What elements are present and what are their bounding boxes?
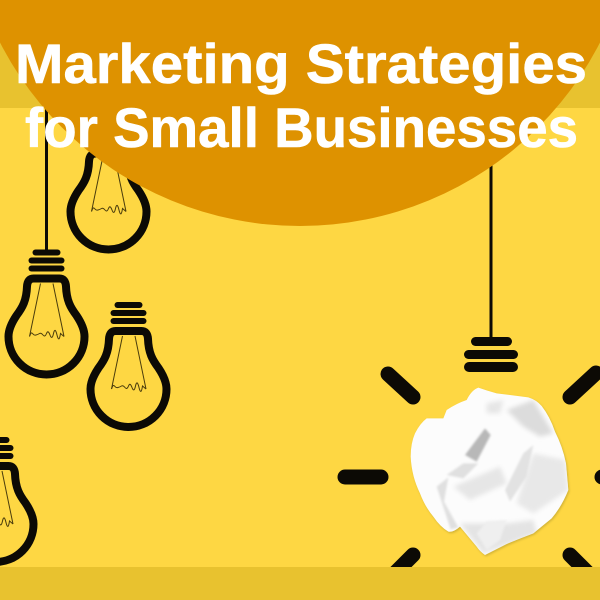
bottom band	[0, 567, 600, 600]
title line 2: for Small Businesses	[25, 96, 578, 159]
icon: large bulb screw cap	[464, 337, 518, 372]
icon: light bulb middle	[90, 302, 166, 427]
cord: large bulb	[490, 160, 492, 340]
title line 1: Marketing Strategies	[15, 32, 587, 95]
top band	[0, 0, 600, 108]
icon: crumpled paper ball	[411, 388, 569, 556]
title	[15, 32, 587, 159]
icon: light bulb left	[8, 250, 84, 374]
icon: light bulb bottom left	[0, 437, 34, 562]
cord: left bulb	[45, 100, 48, 252]
icon: light rays	[345, 373, 600, 580]
icon: light bulb top, partly hidden	[70, 124, 146, 250]
header circle	[0, 0, 600, 226]
